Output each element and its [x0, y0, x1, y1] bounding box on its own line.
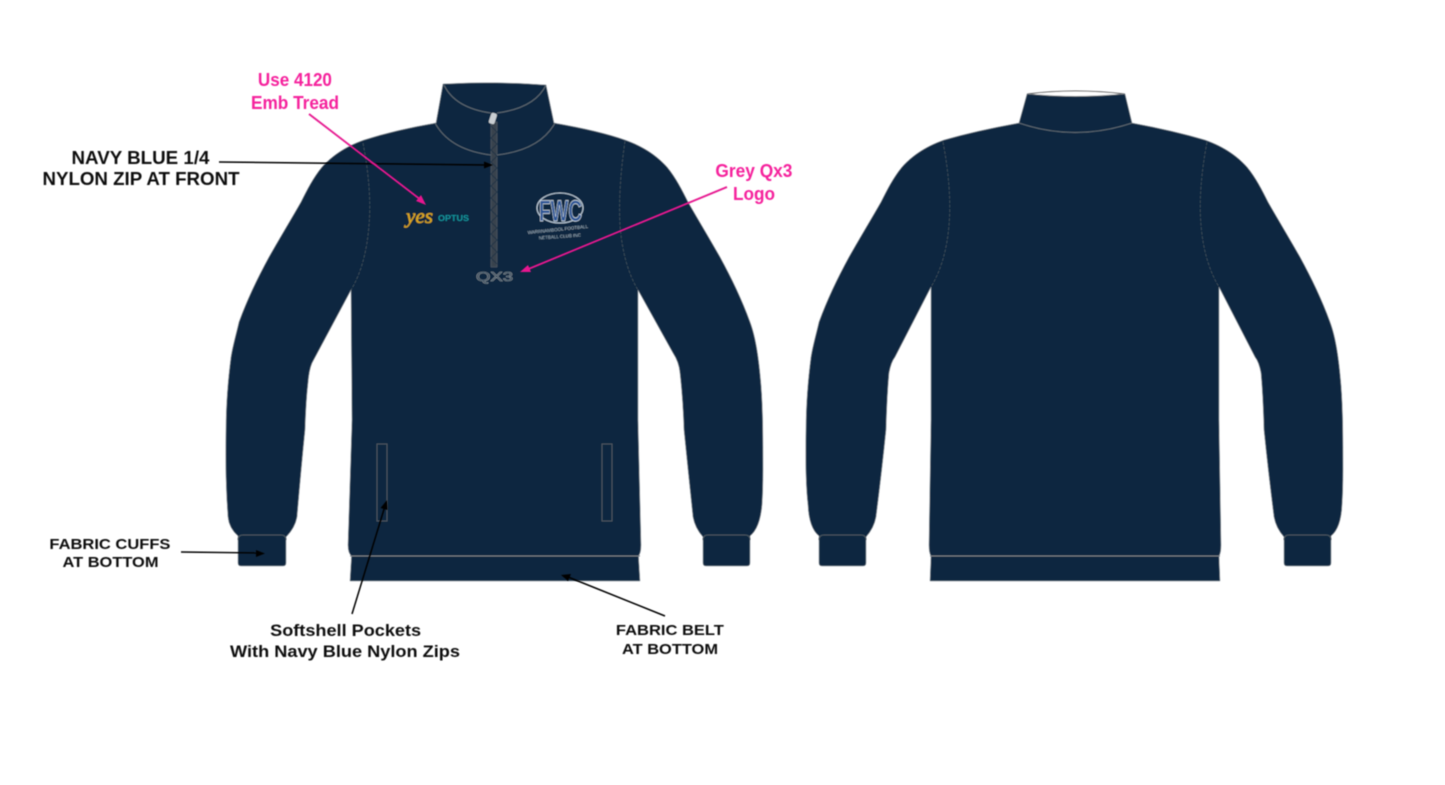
- jacket body back: [806, 94, 1343, 581]
- label: pockets: Softshell Pockets: [270, 621, 421, 640]
- back jacket illustration: [806, 91, 1343, 581]
- jacket body front: [226, 83, 763, 581]
- arrow: qx3 logo: [520, 187, 727, 272]
- label: belt: AT BOTTOM: [622, 641, 718, 658]
- club logo: FWC: FWC: [539, 195, 582, 228]
- sponsor logo: Yes Optus: yes: [404, 204, 433, 228]
- zip: [488, 112, 497, 267]
- label: emb tread: Emb Tread: [251, 92, 339, 113]
- belt seam and cuffs: [238, 535, 750, 556]
- collar opening: [1027, 91, 1125, 96]
- sponsor logo: Yes Optus: [404, 204, 470, 228]
- front jacket illustration: [226, 83, 763, 581]
- labels: [42, 69, 798, 661]
- arrow: cuffs: [181, 550, 265, 557]
- label: grey qx3 logo: Grey Qx3: [715, 160, 792, 181]
- arrows: [181, 114, 727, 616]
- sleeve seams: [351, 141, 638, 290]
- label: cuffs: AT BOTTOM: [62, 554, 158, 571]
- label: belt: FABRIC BELT: [616, 622, 724, 639]
- club logo: FWC: WARRNAMBOOL FOOTBALL: [527, 224, 589, 235]
- club logo: FWC: NETBALL CLUB INC: [539, 232, 582, 240]
- label: emb tread: Use 4120: [258, 69, 332, 90]
- back belt seam and cuffs: [819, 535, 1331, 556]
- label: zip: NAVY BLUE 1/4: [71, 148, 209, 168]
- back sleeve seams: [931, 142, 1219, 287]
- club logo: FWC: [527, 193, 589, 240]
- label: zip: NYLON ZIP AT FRONT: [42, 169, 240, 189]
- QX3 logo: QX3: [476, 270, 513, 284]
- label: pockets: With Navy Blue Nylon Zips: [230, 642, 460, 661]
- collar seams: [435, 85, 555, 155]
- arrow: pockets: [352, 500, 388, 614]
- label: grey qx3 logo: Logo: [733, 183, 775, 204]
- arrow: zip: [219, 162, 493, 168]
- sponsor logo: Yes Optus: OPTUS: [438, 214, 470, 223]
- arrow: emb tread: [309, 114, 426, 205]
- arrow: belt: [561, 574, 665, 616]
- back collar seam: [1019, 123, 1132, 132]
- label: cuffs: FABRIC CUFFS: [49, 536, 170, 553]
- pockets: [377, 444, 612, 521]
